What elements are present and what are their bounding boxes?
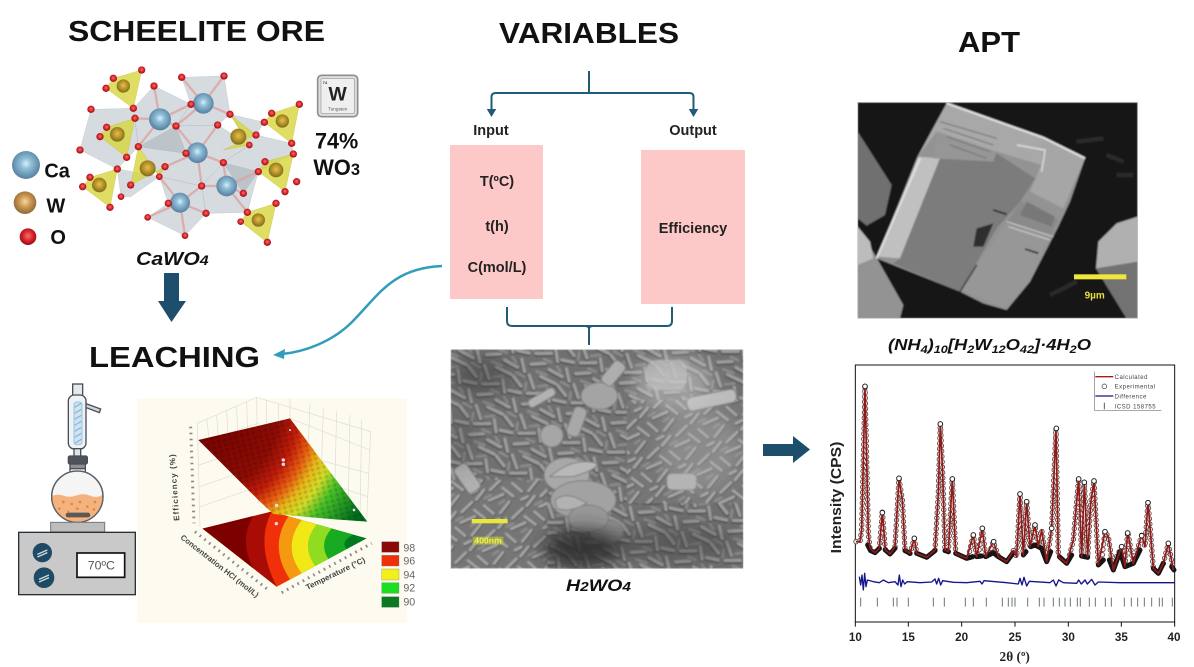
difference curve: [859, 573, 1175, 590]
chart legend: ICSD 158755: [1115, 404, 1156, 410]
chart legend: Calculated: [1115, 375, 1148, 381]
neighbouring particles: [858, 132, 892, 226]
SEM large flakes: [453, 359, 738, 544]
SEM scale bar: [1074, 274, 1126, 302]
box: output variable: [641, 150, 745, 304]
legend: colour scale: [382, 542, 415, 609]
x axis tick labels: 25: [1009, 631, 1022, 644]
chart data points: [275, 429, 355, 525]
polyhedra: calcium coordination: [80, 76, 293, 236]
legend: colour scale: 96: [403, 556, 415, 568]
x axis tick labels: 15: [902, 631, 915, 644]
legend: colour scale: 90: [403, 597, 415, 609]
chart frame: [855, 365, 1175, 627]
arrow: down to leaching: [158, 273, 186, 322]
connector: bottom bracket: [507, 307, 672, 345]
legend: colour scale: 98: [403, 542, 415, 554]
icon: round flask with liquid: [52, 471, 103, 522]
label: APT formula: O: [1006, 337, 1021, 354]
box: input variables: t(h): [485, 219, 509, 235]
panel: leaching apparatus: [19, 384, 135, 595]
axis label: efficiency: Efficiency (%): [168, 454, 181, 521]
x axis label: 2θ (º): [1000, 649, 1030, 664]
chart legend: Experimental: [1115, 385, 1156, 391]
connector: top splitter arrows: [488, 71, 696, 115]
x axis tick labels: 40: [1168, 631, 1180, 644]
image: H2WO4 SEM micrograph: [443, 349, 743, 569]
main crystal: [877, 131, 1086, 311]
atoms: oxygen: [76, 66, 303, 246]
heading: VARIABLES: VARIABLES: [499, 18, 679, 50]
legend: tungsten: [14, 191, 65, 217]
experimental points: dense baseline: [868, 545, 1174, 573]
x axis tick labels: 20: [955, 631, 968, 644]
y axis label: Intensity (CPS): [829, 442, 845, 553]
icon: condenser: [68, 384, 101, 475]
heading: SCHEELITE ORE: SCHEELITE ORE: [68, 16, 325, 48]
label: APT formula: [H: [947, 337, 968, 354]
SEM scale bar: 9µm: [1085, 291, 1105, 302]
chart legend: Difference: [1115, 395, 1147, 401]
icon: hot plate: 70ºC: [88, 558, 115, 572]
text: 74% WO3: [313, 128, 360, 180]
legend: calcium: [12, 151, 71, 182]
text: 74% WO3: 74%: [315, 128, 358, 153]
label: APT formula: 2: [966, 344, 974, 356]
box: input variables: C(mol/L): [468, 260, 527, 276]
SEM scale bar: 400nm: [474, 535, 502, 545]
axis tick marks: [191, 427, 372, 593]
axis label: concentration: Concentration HCl (mol/L): [179, 533, 261, 600]
image: APT SEM micrograph: [858, 102, 1138, 318]
SEM shading: [443, 357, 740, 568]
label: APT formula: W: [974, 337, 994, 354]
label: CaWO4: CaWO4: [136, 248, 209, 269]
panel: variables flow diagram: [450, 71, 745, 345]
legend: calcium: Ca: [44, 160, 71, 182]
box: input variables: T(ºC): [480, 174, 514, 190]
panel: crystal structure and legend: [12, 66, 360, 269]
box: input variables: [450, 145, 543, 299]
icon: tungsten element tile: 74: [323, 80, 328, 85]
experimental points: open circles: [856, 387, 1173, 570]
x axis tick labels: 35: [1115, 631, 1128, 644]
chart grid walls: [197, 397, 371, 527]
chart background: [137, 398, 407, 623]
x axis tick labels: 10: [849, 631, 862, 644]
label: APT formula: 12: [992, 344, 1006, 356]
legend: oxygen: [20, 227, 66, 249]
bonds: [135, 76, 258, 236]
box: output variable: Efficiency: [659, 221, 727, 237]
legend: oxygen: O: [50, 227, 66, 249]
label: APT formula: 10: [934, 344, 949, 356]
icon: tungsten element tile: W: [329, 85, 348, 106]
arrow: right to APT: [763, 436, 810, 463]
label: APT formula: 2: [1069, 344, 1077, 356]
heading: LEACHING: LEACHING: [89, 342, 260, 374]
label: Output: Output: [669, 123, 717, 139]
peak apex circles: [863, 384, 1171, 549]
label: Input: Input: [473, 123, 509, 139]
chart: XRD Rietveld pattern: [829, 365, 1180, 664]
label: H2WO4: H2WO 4: [566, 577, 632, 595]
x axis tick labels: 30: [1062, 631, 1075, 644]
label: APT formula: 4: [919, 344, 928, 356]
axis label: temperature: Temperature (°C): [304, 555, 367, 592]
chart upper surface: [198, 418, 367, 522]
SEM scale bar: [472, 519, 508, 545]
polyhedra: tungstate tetrahedra: [83, 70, 299, 242]
chart lower contour plane: [203, 512, 367, 587]
reflection tick marks: [861, 598, 1172, 607]
calculated curve: [856, 387, 1173, 573]
atoms: calcium: [149, 93, 237, 213]
heading: APT: APT: [958, 27, 1020, 59]
arrow: curved input to leaching: [273, 266, 442, 359]
label: APT formula: ): [925, 337, 934, 354]
icon: tungsten element tile: Tungsten: [328, 107, 348, 112]
label: APT formula: ]·4H: [1032, 337, 1070, 354]
icon: hot plate: [19, 522, 135, 595]
legend: tungsten: W: [46, 195, 65, 217]
chart: 3D response surface: [137, 397, 415, 623]
icon: tungsten element tile: [318, 75, 358, 117]
x axis tick labels: [849, 631, 1180, 644]
chart legend: [1095, 372, 1161, 411]
legend: colour scale: 94: [403, 569, 415, 581]
legend: colour scale: 92: [403, 583, 415, 595]
text: 74% WO3: WO3: [313, 155, 360, 180]
atoms: tungsten: [92, 79, 289, 227]
label: APT formula: O: [1077, 337, 1092, 354]
label: APT formula: (NH: [888, 337, 916, 354]
label: APT formula: 42: [1019, 344, 1034, 356]
